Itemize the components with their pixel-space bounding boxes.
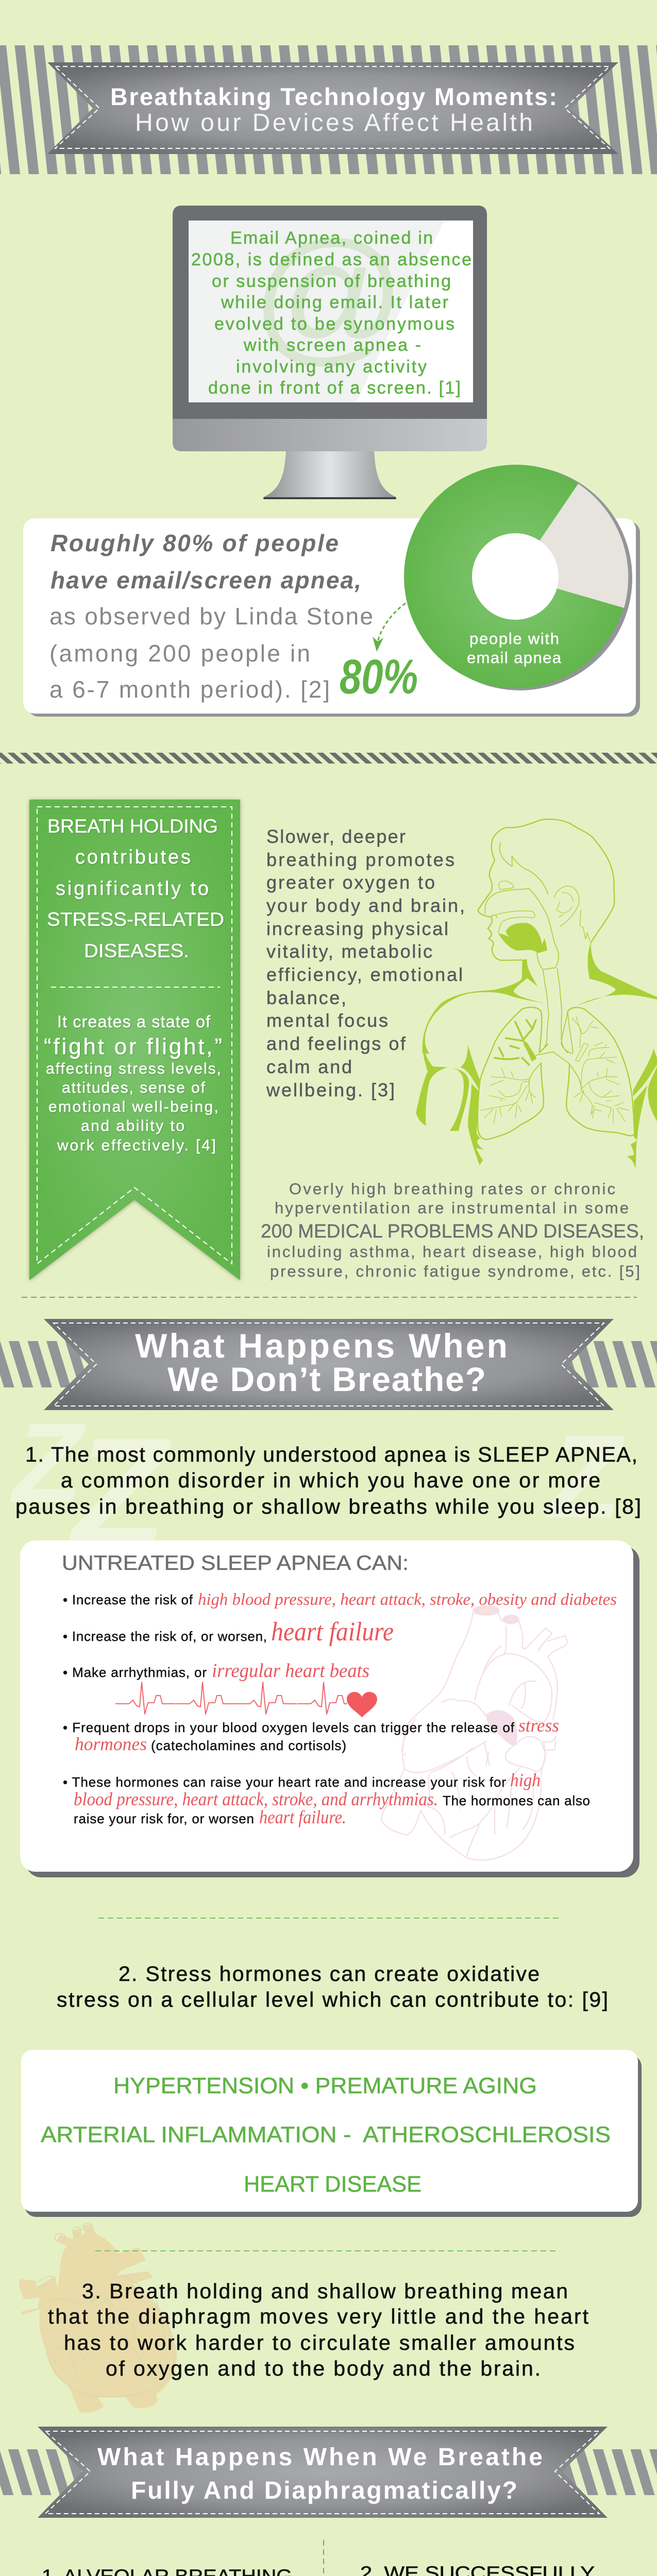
panel: conditions list: ARTERIAL INFLAMMATION - ATHEROSCHLEROSIS xyxy=(41,2122,611,2147)
text: hyperventilation: including asthma, heart disease, high blood xyxy=(267,1243,637,1261)
icon: anatomical heart watermark xyxy=(19,2223,177,2413)
bullet list: heart failure xyxy=(271,1617,394,1647)
section banner: what happens when we don't breathe xyxy=(0,1319,657,1410)
text: breath holding and the diaphragm: that the diaphragm moves very little and the heart xyxy=(48,2304,589,2328)
definition text: or suspension of breathing xyxy=(212,272,451,291)
bullet list: (catecholamines and cortisols) xyxy=(151,1738,346,1753)
section banner: what happens when we don't breathe: What Happens When xyxy=(135,1327,508,1365)
section banner: what happens when we don't breathe: We Don’t Breathe? xyxy=(167,1360,486,1398)
section banner: breathe fully and diaphragmatically xyxy=(0,2427,657,2518)
text: breath holding and the diaphragm: 3. Breath holding and shallow breathing mean xyxy=(82,2279,568,2303)
definition text: 2008, is defined as an absence xyxy=(191,250,471,269)
statistic text: a 6-7 month period). [2] xyxy=(49,676,330,703)
text: breath holding and the diaphragm xyxy=(48,2279,589,2380)
text: sleep apnea intro xyxy=(15,1443,641,1518)
text: sleep apnea intro: a common disorder in which you have one or more xyxy=(61,1468,600,1492)
text: slower deeper breathing: mental focus xyxy=(266,1010,388,1031)
panel: untreated sleep apnea xyxy=(20,1540,639,1877)
text: slower deeper breathing: balance, xyxy=(266,987,346,1008)
bullet list: blood pressure, heart attack, stroke, and arrhythmias. xyxy=(74,1789,438,1809)
title xyxy=(110,83,557,137)
text: slower deeper breathing: and feelings of xyxy=(266,1033,406,1054)
ribbon text: “fight or flight,” xyxy=(44,1034,222,1059)
definition text: with screen apnea - xyxy=(243,335,421,355)
text: slower deeper breathing: breathing promotes xyxy=(266,849,454,870)
definition text xyxy=(191,228,471,398)
icon: sleep z watermarks: Z xyxy=(546,1410,625,1543)
text: hyperventilation: Overly high breathing rates or chronic xyxy=(289,1180,615,1198)
statistic text: as observed by Linda Stone xyxy=(49,603,373,630)
bullet list: The hormones can also xyxy=(443,1793,590,1808)
bullet list: • These hormones can raise your heart rate and increase your risk for xyxy=(63,1774,506,1790)
title: Breathtaking Technology Moments: xyxy=(110,83,557,110)
text: hyperventilation: 200 MEDICAL PROBLEMS AND DISEASES, xyxy=(261,1221,644,1242)
ribbon text: contributes xyxy=(75,846,191,868)
bullet list: high blood pressure, heart attack, stroke, obesity and diabetes xyxy=(198,1590,617,1609)
bullet list xyxy=(63,1590,617,1827)
icon: at sign watermark: @ xyxy=(251,211,406,378)
monitor with email apnea definition xyxy=(173,206,487,499)
ribbon text xyxy=(44,816,224,1154)
bullet list: • Increase the risk of, or worsen, xyxy=(63,1629,267,1644)
panel: conditions list: HEART DISEASE xyxy=(244,2172,422,2197)
ribbon text: BREATH HOLDING xyxy=(47,816,218,837)
icon: sleep z watermarks: Z xyxy=(68,1405,174,1579)
text: slower deeper breathing: wellbeing. [3] xyxy=(266,1079,395,1100)
ribbon text: significantly to xyxy=(56,878,209,900)
statistic text: Roughly 80% of people xyxy=(50,530,339,556)
bullet list: irregular heart beats xyxy=(212,1660,369,1682)
bullet list: • Increase the risk of xyxy=(63,1592,193,1607)
icon: sleep z watermarks: Z xyxy=(10,1399,86,1526)
ribbon text: affecting stress levels, xyxy=(46,1060,221,1077)
text: hyperventilation: hyperventilation are instrumental in some xyxy=(275,1199,629,1217)
section banner: breathe fully and diaphragmatically: What Happens When We Breathe xyxy=(97,2444,543,2471)
text: hyperventilation xyxy=(261,1180,644,1280)
text: sleep apnea intro: 1. The most commonly understood apnea is SLEEP APNEA, xyxy=(25,1443,637,1466)
definition text: Email Apnea, coined in xyxy=(230,228,433,248)
text: stress hormones: 2. Stress hormones can create oxidative xyxy=(119,1962,540,1986)
donut chart xyxy=(404,465,632,690)
icon: ecg line with heart xyxy=(115,1682,377,1717)
text: slower deeper breathing: vitality, metabolic xyxy=(266,941,432,962)
80 percent figure: 80% xyxy=(340,650,418,704)
donut chart: email apnea xyxy=(467,649,562,667)
ribbon text: work effectively. [4] xyxy=(57,1137,216,1154)
text: stress hormones: stress on a cellular level which can contribute to: [9] xyxy=(57,1988,608,2011)
text: slower deeper breathing xyxy=(266,826,465,1100)
donut chart: people with xyxy=(469,630,559,648)
icon: sleep z watermarks xyxy=(10,1399,625,1579)
text: slower deeper breathing: efficiency, emotional xyxy=(266,964,463,985)
icon: respiratory system figure xyxy=(416,819,657,1168)
icon: heart outline watermark xyxy=(381,1606,568,1860)
bullet list: raise your risk for, or worsen xyxy=(74,1811,254,1826)
panel: conditions list: HYPERTENSION • PREMATURE AGING xyxy=(113,2073,537,2098)
statistic text: (among 200 people in xyxy=(49,640,310,667)
bullet list: • Frequent drops in your blood oxygen levels can trigger the release of xyxy=(63,1720,515,1735)
ribbon text: STRESS-RELATED xyxy=(47,909,224,930)
text: slower deeper breathing: increasing physical xyxy=(266,918,448,939)
text: slower deeper breathing: your body and brain, xyxy=(266,895,465,916)
ribbon text: attitudes, sense of xyxy=(62,1079,206,1096)
bullet list: heart failure. xyxy=(259,1807,346,1827)
text: slower deeper breathing: Slower, deeper xyxy=(266,826,406,847)
text: stress hormones xyxy=(57,1962,608,2011)
title: How our Devices Affect Health xyxy=(135,109,533,137)
bullet list: stress xyxy=(518,1715,559,1736)
definition text: involving any activity xyxy=(236,357,427,377)
text: hyperventilation: pressure, chronic fatigue syndrome, etc. [5] xyxy=(270,1262,640,1280)
ribbon text: emotional well-being, xyxy=(48,1098,218,1115)
ribbon text: It creates a state of xyxy=(57,1012,210,1031)
definition text: while doing email. It later xyxy=(221,293,448,312)
text: slower deeper breathing: greater oxygen to xyxy=(266,872,435,893)
text: breath holding and the diaphragm: has to work harder to circulate smaller amounts xyxy=(64,2331,575,2354)
statistic text xyxy=(49,530,373,703)
panel: breath holding ribbon xyxy=(29,800,240,1280)
text: breath holding and the diaphragm: of oxygen and to the body and the brain. xyxy=(106,2357,541,2380)
bullet list: • Make arrhythmias, or xyxy=(63,1665,207,1680)
ribbon text: and ability to xyxy=(81,1117,184,1134)
definition text: done in front of a screen. [1] xyxy=(208,378,461,398)
text: slower deeper breathing: calm and xyxy=(266,1056,352,1077)
bullet list: hormones xyxy=(75,1734,147,1754)
text: sleep apnea intro: pauses in breathing or shallow breaths while you sleep. [8] xyxy=(15,1495,641,1518)
statistic text: have email/screen apnea, xyxy=(50,567,361,594)
arrow to 80 percent xyxy=(373,603,406,652)
definition text: evolved to be synonymous xyxy=(214,314,454,334)
panel: 80 percent statistic xyxy=(23,465,640,717)
panel: conditions list xyxy=(21,2050,642,2217)
section banner: breathe fully and diaphragmatically: Fully And Diaphragmatically? xyxy=(131,2477,517,2504)
bullet list: high xyxy=(510,1770,541,1790)
ribbon text: DISEASES. xyxy=(84,940,189,961)
panel heading: UNTREATED SLEEP APNEA CAN: xyxy=(62,1552,409,1574)
header banner xyxy=(0,45,657,174)
